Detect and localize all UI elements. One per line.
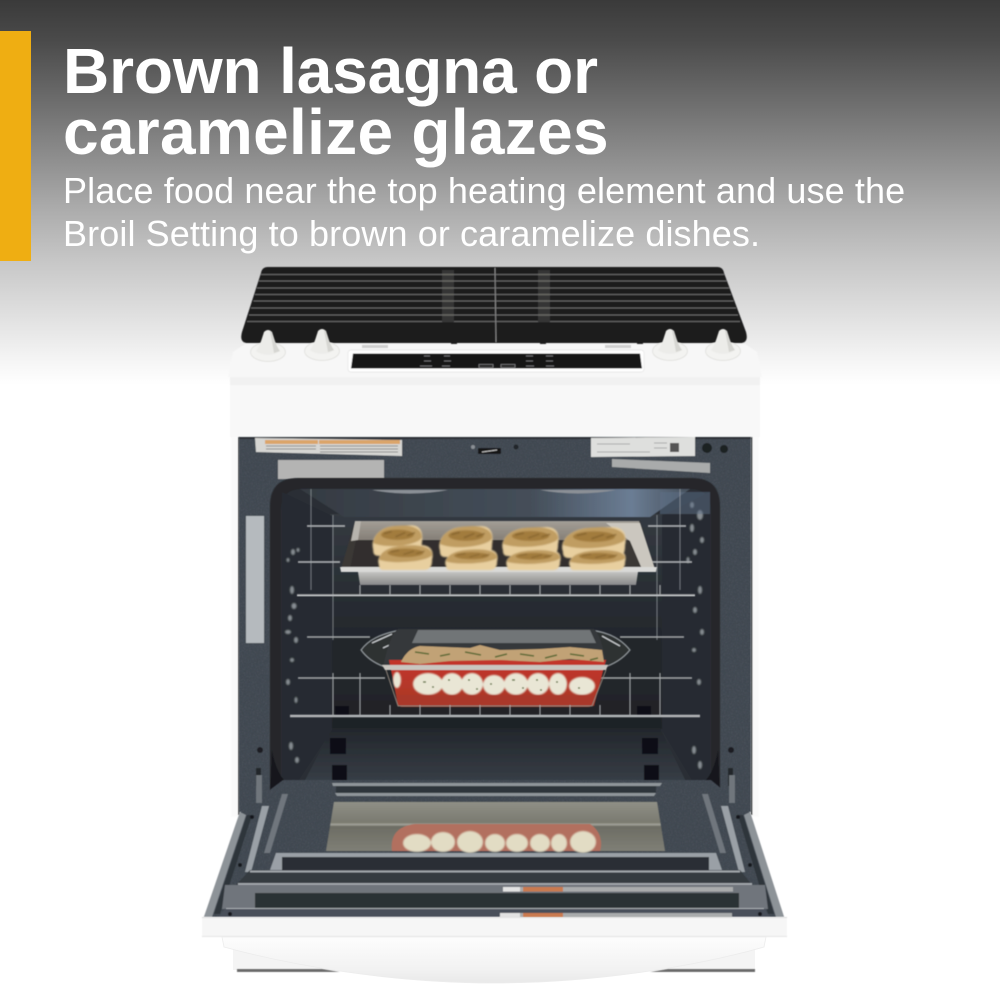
bread slice 8: [569, 550, 626, 570]
upper rack front bar and wires: [297, 585, 695, 596]
lower oven rack back wires: [298, 637, 692, 678]
bread slice 2: [439, 526, 493, 557]
upper oven rack: [298, 489, 692, 640]
cooktop: black cast-iron grates: [241, 267, 747, 347]
range base and feet: [233, 937, 755, 972]
bread slice 3: [502, 527, 559, 556]
glass dish of lasagna: [361, 629, 630, 707]
sauce: [389, 660, 606, 706]
icon: burner knob 3: [652, 329, 688, 360]
bread slice 4: [562, 527, 626, 558]
right side wall: [662, 492, 710, 790]
browned top: [401, 645, 604, 664]
label: rating plate: [591, 437, 695, 457]
door top rims: [332, 783, 662, 796]
bread slice 7: [506, 550, 561, 570]
subtitle: Broil Setting to brown or caramelize dishes.: [63, 213, 760, 254]
inner dark seal strip: [270, 853, 722, 870]
label: left side sticker: [246, 516, 264, 643]
silver pressed ridges: [236, 870, 752, 885]
title: [63, 35, 609, 168]
ceiling: [300, 489, 690, 517]
icon: burner knob 2: [304, 329, 340, 360]
baking sheet with bread slices: [340, 521, 657, 585]
front glass rim: [382, 665, 608, 670]
outer dark seal strip: [255, 893, 739, 908]
accent bar: [0, 31, 31, 261]
back wall: [330, 514, 662, 729]
cooktop front panel: [228, 329, 762, 377]
open oven door: [200, 780, 790, 920]
oven body: white front and side trim: [230, 377, 760, 817]
subtitle: [63, 170, 905, 254]
door left and right edges: [204, 812, 784, 917]
label: model sticker: [612, 459, 710, 473]
bread slice 5: [378, 545, 433, 570]
door window with lasagna reflection: [326, 802, 665, 853]
bottom sauce: [396, 695, 596, 707]
subtitle: Place food near the top heating element and use the: [63, 170, 905, 211]
control display: [348, 350, 644, 372]
door side ridges: [245, 806, 745, 872]
left side wall: [282, 492, 332, 790]
oven cavity: [270, 478, 720, 795]
lower rack front bar and wires: [290, 673, 700, 716]
floor: [300, 728, 690, 790]
label: instruction sticker: [278, 460, 384, 479]
title: caramelize glazes: [63, 96, 609, 168]
door sticker lower: [500, 913, 732, 918]
gasket: [270, 478, 720, 795]
door latch: [471, 444, 518, 454]
illustration: open white gas range: [202, 266, 787, 984]
heading block: [63, 35, 905, 254]
icon: door screws: [228, 815, 762, 916]
icon: burner knob 4: [706, 329, 740, 360]
bread slice 1: [373, 525, 422, 556]
label: warning sticker: [255, 438, 402, 456]
icon: frame screws: [256, 443, 734, 786]
door white outer edge: [202, 917, 787, 937]
oven frame: speckled blue-grey enamel: [239, 437, 751, 812]
oven door handle: [222, 937, 766, 983]
title: Brown lasagna or: [63, 35, 598, 107]
side wall glints: [285, 502, 704, 769]
icon: burner knob 1: [250, 330, 286, 362]
oven hinges: [256, 775, 735, 803]
glass back wall: [383, 629, 607, 667]
cheese rolls: [393, 672, 595, 695]
bread slice 6: [445, 549, 498, 570]
door sticker upper: [503, 887, 733, 892]
gasket lower corners: [270, 750, 720, 795]
glass handles: [361, 630, 630, 668]
